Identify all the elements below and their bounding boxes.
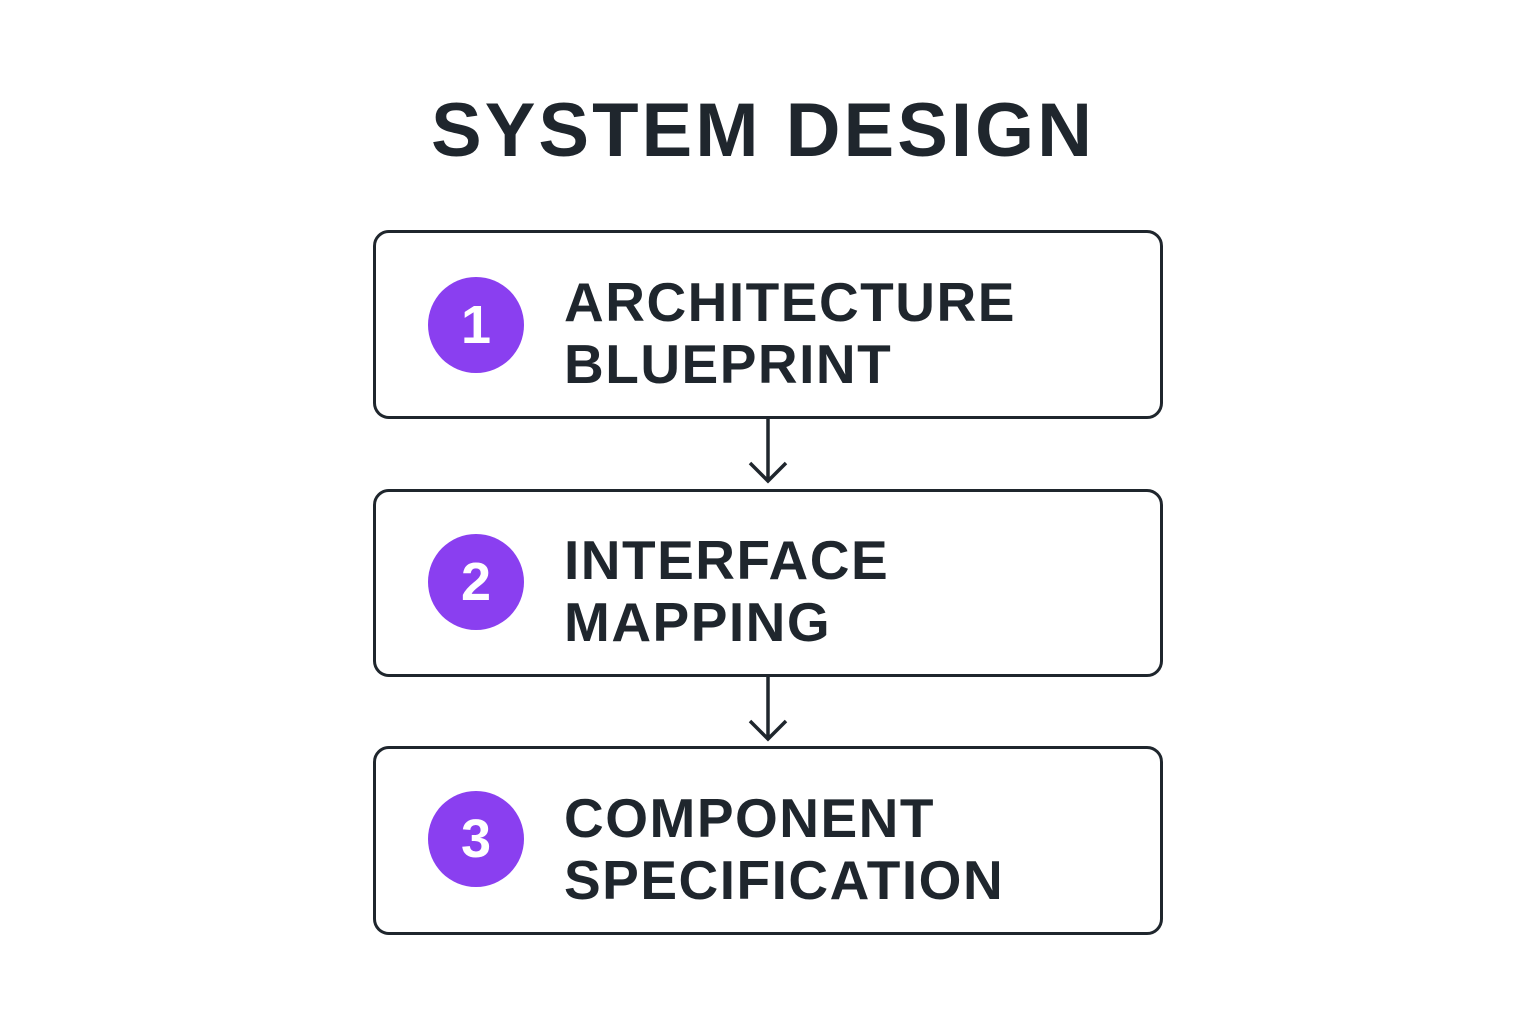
title: SYSTEM DESIGN [431, 88, 1095, 173]
label 3: SPECIFICATION [564, 849, 1004, 911]
badge 1 [428, 277, 524, 373]
arrow 1 [748, 419, 788, 484]
badge 2: 2 [461, 552, 491, 612]
badge 3: 3 [461, 809, 491, 869]
label 2: INTERFACE [564, 529, 889, 591]
label 3 [564, 787, 1004, 911]
label 1 [564, 271, 1016, 395]
panel: step 1 [373, 230, 1163, 419]
panel: step 2 [373, 489, 1163, 677]
label 2 [564, 529, 889, 653]
label 3: COMPONENT [564, 787, 935, 849]
label 1: ARCHITECTURE [564, 271, 1016, 333]
badge 1: 1 [461, 295, 491, 355]
arrow 2 [748, 677, 788, 742]
label 1: BLUEPRINT [564, 333, 892, 395]
badge 3 [428, 791, 524, 887]
badge 2 [428, 534, 524, 630]
label 2: MAPPING [564, 591, 831, 653]
panel: step 3 [373, 746, 1163, 935]
